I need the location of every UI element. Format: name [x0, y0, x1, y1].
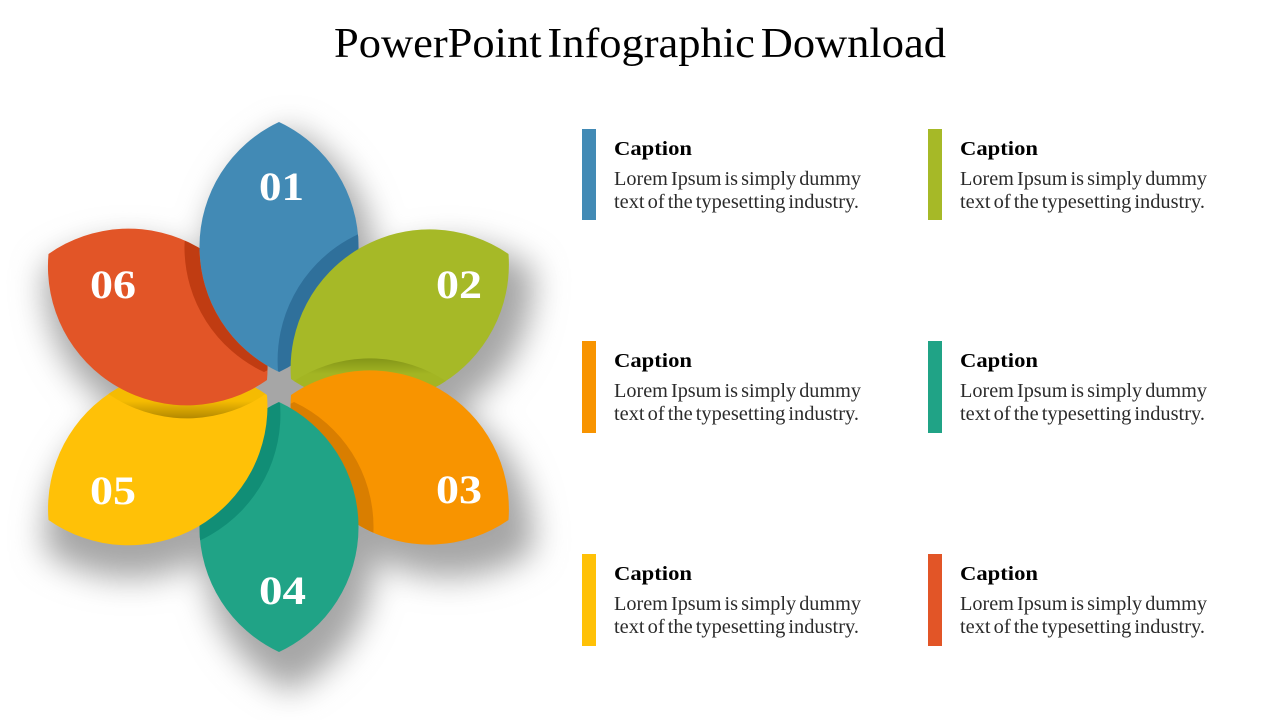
petal 01 blue [199, 122, 359, 372]
caption block 06 [928, 554, 1207, 646]
petal 06 red [48, 228, 268, 406]
caption block 04: text of the typesetting industry. [960, 403, 1205, 425]
caption block 01: Caption [614, 138, 692, 160]
caption block 03 [582, 341, 861, 433]
caption block 02: Caption [960, 138, 1038, 160]
petal 02 green [290, 229, 509, 387]
petal 05 yellow [48, 388, 268, 546]
caption block 05: text of the typesetting industry. [614, 616, 859, 638]
number 04: 04 [259, 568, 306, 613]
caption block 05 [582, 554, 861, 646]
caption block 03: Lorem Ipsum is simply dummy [614, 380, 861, 402]
caption block 02 [928, 129, 1207, 220]
caption block 01: text of the typesetting industry. [614, 191, 859, 213]
caption block 03: text of the typesetting industry. [614, 403, 859, 425]
number 03: 03 [436, 467, 482, 512]
caption block 05: Caption [614, 563, 692, 585]
caption block 04: Lorem Ipsum is simply dummy [960, 380, 1207, 402]
caption block 04 [928, 341, 1207, 433]
caption block 04: Caption [960, 350, 1038, 372]
petal 04 teal [199, 402, 358, 652]
caption block 05: Lorem Ipsum is simply dummy [614, 593, 861, 615]
number 02: 02 [436, 262, 482, 307]
title: PowerPoint Infographic Download [334, 21, 946, 67]
caption block 01 [582, 129, 861, 220]
flower shadow [45, 129, 533, 691]
caption block 06: Caption [960, 563, 1038, 585]
petal 03 orange [290, 370, 509, 545]
caption block 06: Lorem Ipsum is simply dummy [960, 593, 1207, 615]
number 01: 01 [259, 164, 304, 209]
number 06: 06 [90, 262, 136, 307]
caption block 01: Lorem Ipsum is simply dummy [614, 168, 861, 190]
caption block 03: Caption [614, 350, 692, 372]
caption block 02: Lorem Ipsum is simply dummy [960, 168, 1207, 190]
number 05: 05 [90, 468, 136, 513]
caption block 06: text of the typesetting industry. [960, 616, 1205, 638]
caption block 02: text of the typesetting industry. [960, 191, 1205, 213]
